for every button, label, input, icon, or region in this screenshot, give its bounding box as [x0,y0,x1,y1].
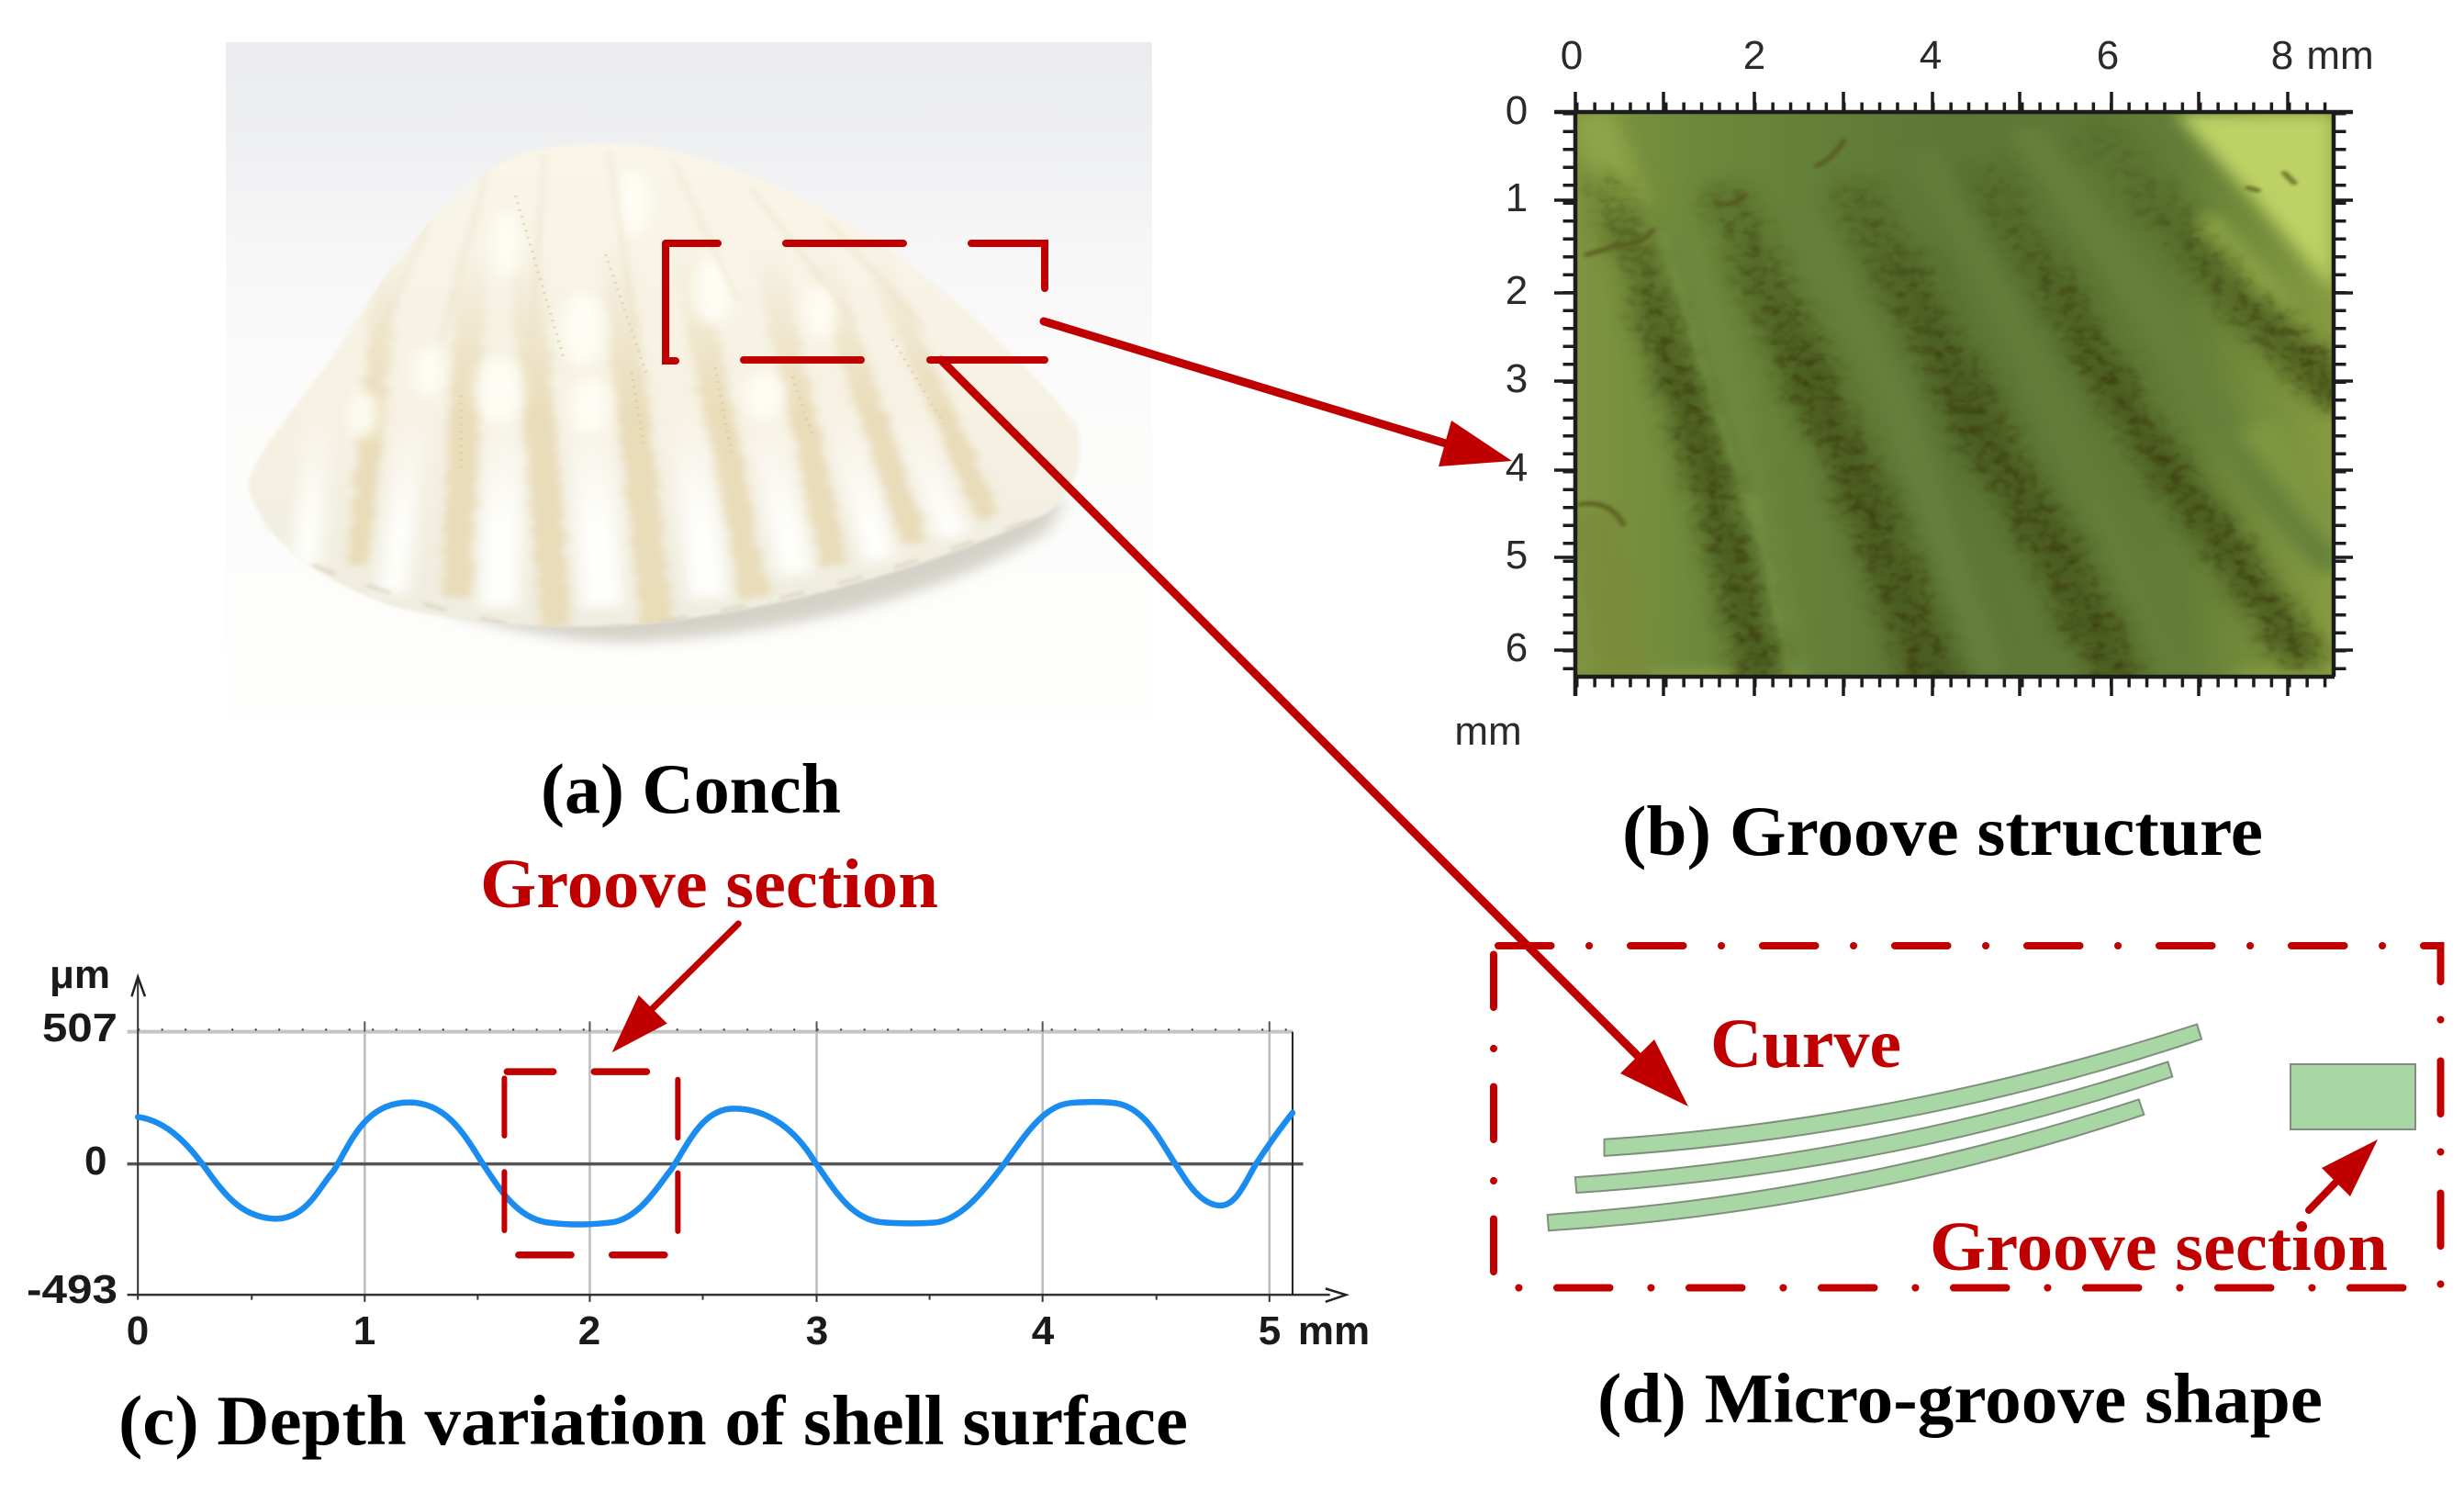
left axis labels: 5 [1506,533,1528,578]
dark grooves [1610,129,2340,682]
arrow: shell to groove structure [1044,321,1512,466]
y axis labels [27,952,118,1312]
x axis labels: 1 [353,1308,375,1353]
panel: (b) groove structure micrograph [1454,33,2374,754]
thin lit ridges [1680,297,1788,665]
dashed groove section box [504,1072,678,1255]
left axis labels: 6 [1506,625,1528,670]
x axis labels: 4 [1032,1308,1055,1353]
arrow: to groove section [612,924,738,1052]
top axis labels: mm [2306,33,2374,78]
bead texture [461,196,944,471]
x axis labels: 3 [806,1308,828,1353]
top axis labels: 4 [1920,33,1942,78]
depth curve [138,1102,1293,1224]
caption: (d) Micro-groove shape: (d) Micro-groove shape [1597,1359,2323,1438]
top axis labels: 6 [2097,33,2119,78]
curved micro-grooves [1548,1025,2201,1230]
left axis labels: 2 [1506,268,1528,313]
surface marks [1580,140,2294,524]
panel: (d) micro-groove shape [1494,946,2440,1287]
top axis labels: 2 [1743,33,1765,78]
left axis labels: mm [1454,709,1522,754]
panel: (c) depth profile chart [27,924,1370,1353]
label: Groove section: Groove section [1930,1208,2388,1285]
top axis labels: 8 [2271,33,2293,78]
tan grooves [343,274,1001,626]
panel: (a) conch photo [226,42,1152,718]
chart grid and axes [128,977,1346,1302]
y axis labels: μm [50,952,110,997]
x axis labels: mm [1298,1308,1370,1353]
left axis labels: 1 [1506,175,1528,220]
y axis labels: 507 [42,1005,118,1050]
arrow: to groove section rectangle [2309,1139,2378,1210]
dashed selection box on shell [666,243,1045,361]
micrograph image [1575,114,2340,682]
fine ridge lines [398,152,876,336]
x axis labels: 2 [578,1308,600,1353]
caption: (a) Conch: (a) Conch [541,749,841,828]
top axis labels [1561,33,2374,78]
y axis labels: 0 [84,1139,106,1184]
caption: (b) Groove structure: (b) Groove structure [1622,791,2263,870]
label: Curve: Curve [1710,1005,1901,1083]
x axis labels: 5 [1259,1308,1281,1353]
top axis labels: 0 [1561,33,1583,78]
left axis labels [1454,88,1528,754]
x axis labels: 0 [127,1308,149,1353]
label: Groove section (chart): Groove section [480,846,938,923]
x axis labels [127,1308,1370,1353]
icon: conch shell [248,144,1080,643]
groove section rectangle [2290,1064,2415,1129]
caption: (c) Depth variation of shell surface: (c) Depth variation of shell surface [118,1381,1188,1460]
dash-dot frame [1494,946,2440,1287]
white ridges [290,438,968,610]
left axis labels: 0 [1506,88,1528,133]
upper dome highlights [350,170,837,438]
y axis labels: -493 [27,1267,118,1312]
arrow: shell to micro-groove shape [941,360,1688,1106]
left axis labels: 3 [1506,356,1528,401]
left axis labels: 4 [1506,445,1528,490]
axes and ticks [1554,92,2353,696]
scalloped lower rim [311,520,1028,625]
